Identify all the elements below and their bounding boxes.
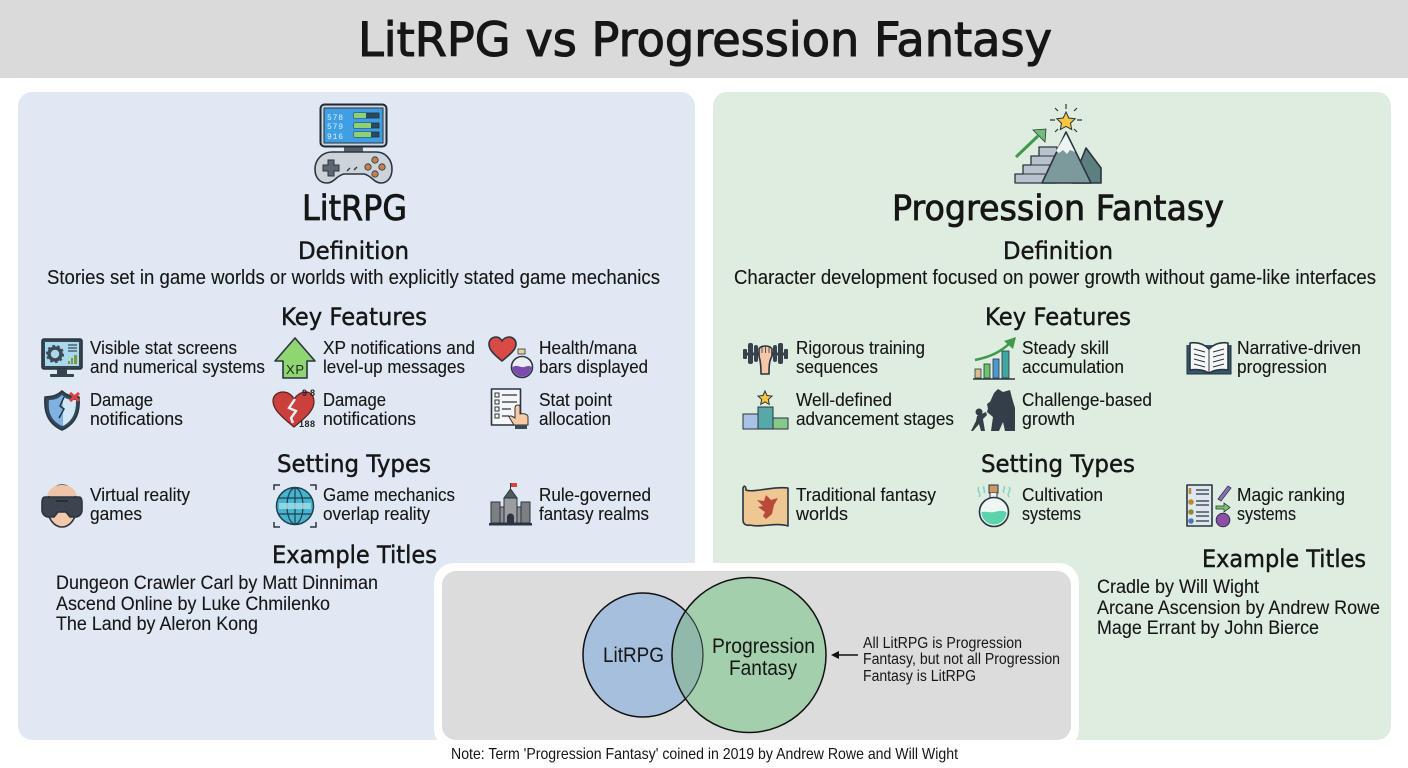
feature: XP notifications — [275, 338, 475, 378]
setting: rule-governed fantasy realms: Rule-governed — [539, 485, 651, 505]
icon: game monitor and controller — [315, 104, 392, 183]
panel: Progression Fantasy — [713, 92, 1391, 740]
feature: XP notifications: XP notifications and — [323, 338, 475, 358]
setting: magic ranking systems: systems — [1237, 504, 1296, 524]
chart: venn circles: Progression — [712, 635, 815, 658]
feature: steady skill accumulation: Steady skill — [1022, 338, 1109, 358]
feature: visible stat screens — [42, 338, 265, 377]
feature: health and mana bars — [489, 337, 648, 378]
chart: venn circles: LitRPG — [603, 644, 664, 667]
setting: traditional fantasy worlds: Traditional fantasy — [796, 485, 936, 505]
heading: key features: Key Features — [985, 303, 1131, 331]
feature: damage notifications heart: 188 — [299, 419, 315, 429]
feature: damage notifications shield: Damage — [90, 390, 153, 410]
title banner — [0, 0, 1408, 78]
feature: challenge-based growth — [971, 389, 1152, 431]
text: example titles list: The Land by Aleron Kong — [56, 614, 258, 635]
heading: setting types: Setting Types — [981, 450, 1135, 478]
feature: rigorous training: Rigorous training — [796, 338, 925, 358]
setting: magic ranking systems — [1187, 485, 1345, 527]
feature: damage notifications heart: 98 — [302, 388, 315, 398]
setting: traditional fantasy worlds: worlds — [795, 504, 848, 524]
chart: venn circles: Fantasy — [729, 657, 797, 680]
setting: game mechanics overlap reality: overlap reality — [323, 504, 430, 524]
setting: rule-governed fantasy realms: fantasy realms — [539, 504, 649, 524]
setting: virtual reality: games — [90, 504, 142, 524]
feature: steady skill accumulation: accumulation — [1022, 357, 1124, 377]
setting: game mechanics overlap reality: Game mechanics — [323, 485, 455, 505]
footnote: Note: Term 'Progression Fantasy' coined in 2019 by Andrew Rowe and Will Wight — [451, 746, 958, 763]
setting: cultivation systems — [978, 485, 1103, 526]
feature: steady skill accumulation — [973, 337, 1124, 379]
feature: damage notifications heart: Damage — [323, 390, 386, 410]
setting: magic ranking systems: Magic ranking — [1237, 485, 1345, 505]
setting: cultivation systems: systems — [1022, 504, 1081, 524]
setting: cultivation systems: Cultivation — [1022, 485, 1103, 505]
feature: visible stat screens: Visible stat screens — [90, 338, 237, 358]
text: example titles list — [1097, 577, 1380, 639]
feature: XP notifications: level-up messages — [323, 357, 465, 377]
setting: rule-governed fantasy realms — [489, 483, 651, 526]
text: definition: Stories set in game worlds or worlds with explicitly stated game mechanics — [47, 267, 660, 289]
feature: damage notifications shield — [45, 390, 183, 430]
heading: setting types: Setting Types — [277, 450, 431, 478]
icon: stairs, mountain and star — [1015, 104, 1101, 183]
setting: virtual reality — [42, 485, 190, 527]
feature: challenge-based growth: growth — [1022, 409, 1075, 429]
callout: relationship text: Fantasy is LitRPG — [863, 668, 976, 685]
text: example titles list — [56, 573, 378, 635]
setting: game mechanics overlap reality — [274, 485, 455, 527]
text: example titles list: Arcane Ascension by Andrew Rowe — [1097, 598, 1380, 619]
text: example titles list: Dungeon Crawler Carl by Matt Dinniman — [56, 573, 378, 594]
feature: damage notifications shield: notifications — [90, 409, 183, 429]
feature: health and mana bars: Health/mana — [539, 338, 638, 358]
icon: game monitor and controller: 916 — [327, 133, 343, 142]
chart: venn circles — [583, 578, 826, 732]
heading: Progression Fantasy: Progression Fantasy — [892, 189, 1224, 229]
panel: LitRPG — [18, 92, 695, 740]
heading: definition: Definition — [1003, 237, 1113, 265]
callout: relationship text: All LitRPG is Progression — [863, 635, 1022, 652]
feature: narrative-driven progression: progression — [1237, 357, 1327, 377]
feature: narrative-driven progression: Narrative-driven — [1237, 338, 1361, 358]
arrow: callout pointer — [831, 651, 858, 659]
setting: virtual reality: Virtual reality — [90, 485, 190, 505]
feature: stat point allocation — [492, 389, 612, 429]
text: example titles list: Ascend Online by Luke Chmilenko — [56, 594, 330, 615]
feature: challenge-based growth: Challenge-based — [1022, 390, 1152, 410]
callout: relationship text — [863, 635, 1060, 685]
text: example titles list: Mage Errant by John Bierce — [1097, 618, 1319, 639]
feature: narrative-driven progression — [1187, 338, 1361, 377]
setting: traditional fantasy worlds — [743, 485, 936, 526]
feature: stat point allocation: Stat point — [539, 390, 612, 410]
text: definition: Character development focused on power growth without game-like interfaces — [734, 267, 1376, 289]
feature: advancement stages: Well-defined — [796, 390, 892, 410]
heading: definition: Definition — [298, 237, 409, 265]
icon: game monitor and controller: 578 — [327, 114, 343, 123]
title banner: LitRPG vs Progression Fantasy — [358, 13, 1052, 68]
heading: key features: Key Features — [281, 303, 427, 331]
feature: health and mana bars: bars displayed — [539, 357, 648, 377]
feature: visible stat screens: and numerical systems — [90, 357, 265, 377]
feature: advancement stages — [743, 390, 954, 429]
feature: rigorous training: sequences — [796, 357, 878, 377]
feature: damage notifications heart: notifications — [323, 409, 416, 429]
feature: damage notifications heart — [273, 388, 416, 429]
feature: XP notifications: XP — [286, 362, 304, 377]
icon: game monitor and controller: 579 — [327, 123, 343, 132]
feature: advancement stages: advancement stages — [796, 409, 954, 429]
feature: stat point allocation: allocation — [539, 409, 611, 429]
panel: venn diagram — [434, 563, 1079, 749]
heading: example titles: Example Titles — [272, 541, 437, 569]
callout: relationship text: Fantasy, but not all Progression — [863, 651, 1060, 668]
feature: rigorous training — [743, 338, 925, 377]
text: example titles list: Cradle by Will Wight — [1097, 577, 1260, 598]
heading: example titles: Example Titles — [1202, 545, 1366, 573]
heading: LitRPG: LitRPG — [302, 189, 407, 229]
